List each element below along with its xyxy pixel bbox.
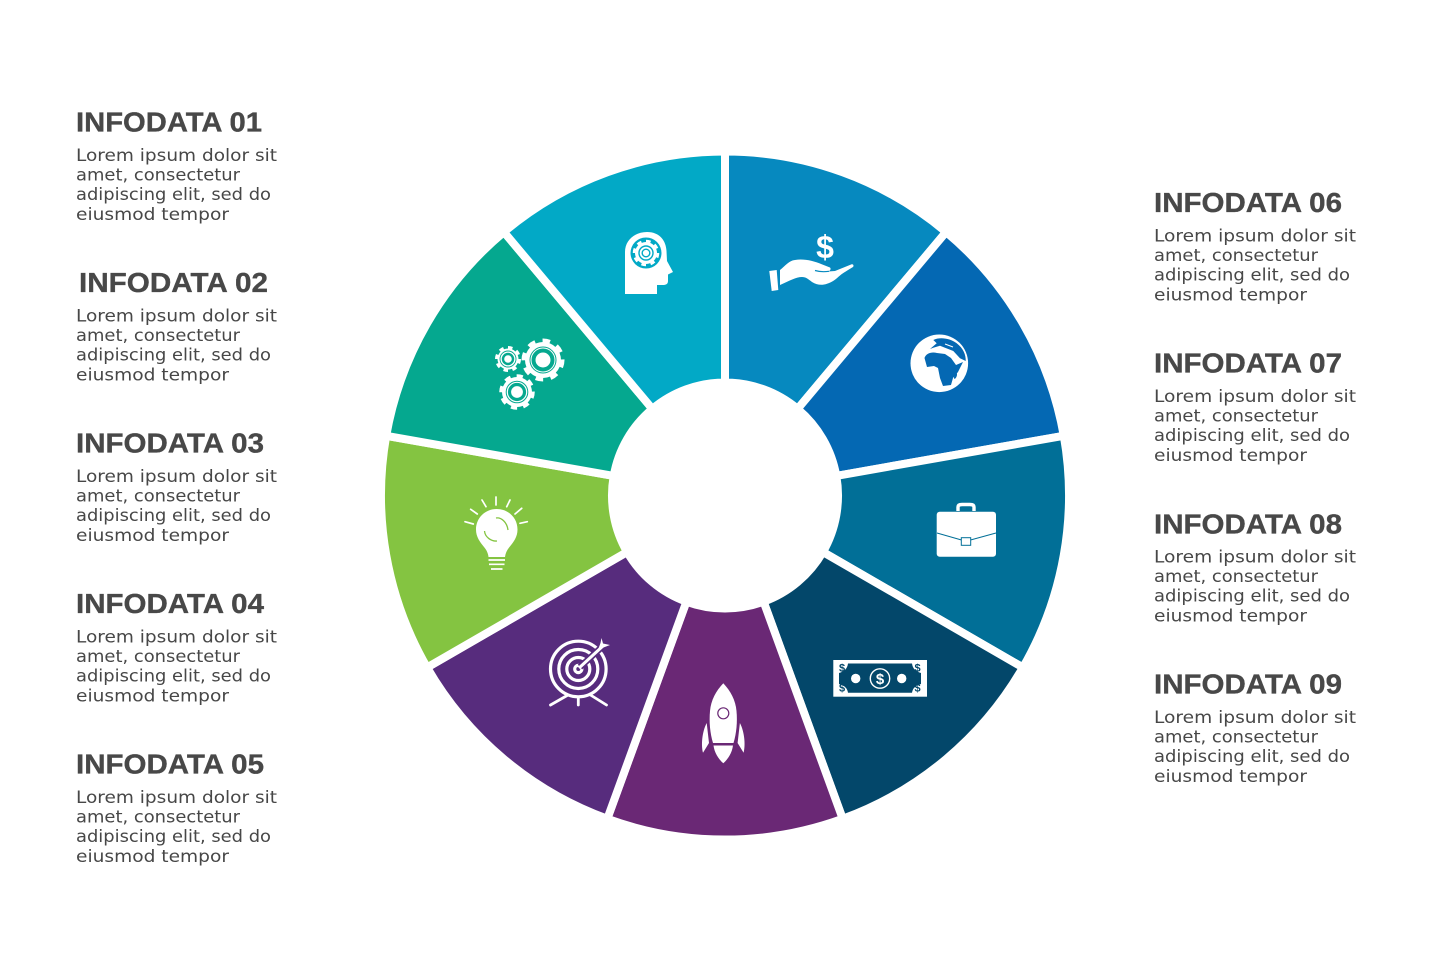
body text: infodata 02: eiusmod tempor — [76, 365, 229, 384]
body text: infodata 04: adipiscing elit, sed do — [76, 667, 271, 686]
heading: infodata 05: INFODATA 05 — [76, 749, 264, 780]
text block: infodata 06 — [1154, 187, 1357, 304]
body text: infodata 06 — [1154, 226, 1357, 304]
segment: royal blue — [798, 232, 1064, 476]
body text: infodata 02: Lorem ipsum dolor sit — [76, 306, 278, 326]
body text: infodata 06: eiusmod tempor — [1154, 285, 1307, 304]
text block: infodata 09 — [1154, 669, 1357, 786]
body text: infodata 09: amet, consectetur — [1154, 727, 1318, 746]
body text: infodata 05 — [76, 788, 278, 866]
segment: navy — [764, 552, 1023, 819]
text block: infodata 04 — [76, 588, 278, 705]
body text: infodata 06: amet, consectetur — [1154, 246, 1318, 265]
icon: banknote: $ — [914, 662, 921, 674]
icon: banknote: $ — [876, 671, 885, 688]
icon: head with gear — [625, 232, 673, 294]
body text: infodata 01: eiusmod tempor — [76, 205, 229, 224]
segment: lime green — [381, 436, 627, 668]
heading: infodata 04: INFODATA 04 — [76, 588, 264, 619]
text block: infodata 05 — [76, 749, 278, 866]
body text: infodata 09: Lorem ipsum dolor sit — [1154, 708, 1357, 727]
segment: teal green — [386, 232, 652, 476]
heading: infodata 07: INFODATA 07 — [1154, 348, 1342, 379]
body text: infodata 08: Lorem ipsum dolor sit — [1154, 548, 1357, 566]
body text: infodata 08: eiusmod tempor — [1154, 606, 1307, 625]
body text: infodata 07: adipiscing elit, sed do — [1154, 426, 1350, 445]
icon: banknote: $ — [839, 682, 845, 694]
body text: infodata 09 — [1154, 708, 1357, 786]
heading: infodata 08: INFODATA 08 — [1154, 509, 1342, 540]
body text: infodata 08: adipiscing elit, sed do — [1154, 587, 1350, 606]
icon: target with arrow — [550, 638, 610, 705]
body text: infodata 01: Lorem ipsum dolor sit — [76, 146, 278, 165]
text block: infodata 02 — [76, 267, 278, 384]
heading: infodata 09: INFODATA 09 — [1154, 669, 1342, 700]
body text: infodata 08 — [1154, 548, 1357, 625]
heading: infodata 06: INFODATA 06 — [1154, 187, 1342, 218]
segment: top right blue — [725, 152, 946, 409]
body text: infodata 01 — [76, 146, 278, 224]
body text: infodata 03: Lorem ipsum dolor sit — [76, 467, 278, 486]
icon: banknote — [833, 660, 927, 697]
heading: infodata 03: INFODATA 03 — [76, 428, 264, 459]
icon: gears — [496, 340, 562, 408]
body text: infodata 05: Lorem ipsum dolor sit — [76, 788, 278, 807]
body text: infodata 07 — [1154, 387, 1357, 465]
body text: infodata 03 — [76, 467, 278, 545]
icon: banknote: $ — [914, 682, 921, 694]
icon: hand with dollar: $ — [816, 229, 834, 265]
segment: cyan — [504, 152, 725, 409]
icon: hand with dollar — [769, 229, 854, 291]
icon: briefcase — [937, 504, 996, 557]
body text: infodata 02 — [76, 306, 278, 384]
body text: infodata 08: amet, consectetur — [1154, 567, 1318, 586]
segment: violet — [427, 552, 686, 819]
body text: infodata 05: amet, consectetur — [76, 807, 240, 826]
icon: light bulb — [465, 497, 527, 569]
body text: infodata 01: adipiscing elit, sed do — [76, 185, 271, 204]
icon: rocket — [702, 683, 745, 763]
body text: infodata 02: amet, consectetur — [76, 326, 240, 345]
body text: infodata 03: amet, consectetur — [76, 486, 240, 505]
heading: infodata 02: INFODATA 02 — [79, 267, 268, 298]
body text: infodata 04: Lorem ipsum dolor sit — [76, 628, 278, 646]
body text: infodata 05: eiusmod tempor — [76, 847, 229, 866]
icon: globe — [910, 334, 968, 392]
segment: steel blue — [823, 436, 1069, 668]
text block: infodata 07 — [1154, 348, 1357, 465]
icon: banknote: $ — [839, 662, 845, 674]
wheel chart — [381, 152, 1069, 840]
body text: infodata 06: Lorem ipsum dolor sit — [1154, 226, 1357, 246]
body text: infodata 09: eiusmod tempor — [1154, 767, 1307, 786]
body text: infodata 05: adipiscing elit, sed do — [76, 827, 271, 846]
body text: infodata 07: eiusmod tempor — [1154, 446, 1307, 465]
body text: infodata 01: amet, consectetur — [76, 165, 240, 184]
body text: infodata 09: adipiscing elit, sed do — [1154, 747, 1350, 766]
text block: infodata 01 — [76, 107, 278, 224]
body text: infodata 03: eiusmod tempor — [76, 526, 229, 545]
segment: magenta purple — [607, 602, 843, 840]
body text: infodata 02: adipiscing elit, sed do — [76, 346, 271, 365]
body text: infodata 03: adipiscing elit, sed do — [76, 506, 271, 525]
body text: infodata 04 — [76, 628, 278, 705]
body text: infodata 07: Lorem ipsum dolor sit — [1154, 387, 1357, 406]
text block: infodata 08 — [1154, 509, 1357, 625]
body text: infodata 04: amet, consectetur — [76, 647, 240, 666]
body text: infodata 06: adipiscing elit, sed do — [1154, 266, 1350, 285]
body text: infodata 07: amet, consectetur — [1154, 406, 1318, 425]
body text: infodata 04: eiusmod tempor — [76, 686, 229, 705]
heading: infodata 01: INFODATA 01 — [76, 107, 262, 138]
text block: infodata 03 — [76, 428, 278, 545]
